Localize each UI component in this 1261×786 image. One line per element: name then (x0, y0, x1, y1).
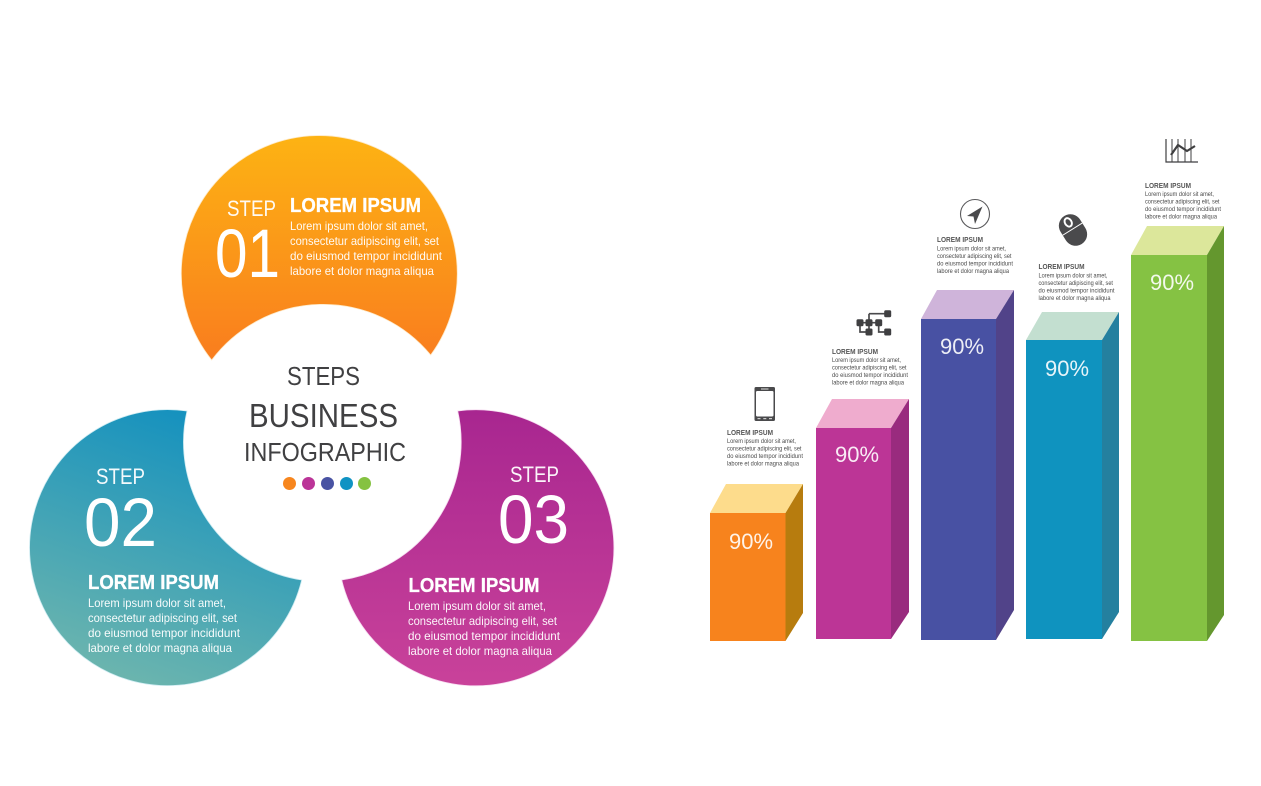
body text 02: do eiusmod tempor incididunt (88, 626, 241, 640)
bar 2: magenta: 90% (835, 442, 879, 467)
caption: bar 2: labore et dolor magna aliqua (832, 380, 904, 386)
caption: bar 2: Lorem ipsum dolor sit amet, (832, 357, 901, 364)
bar 5: green: 90% (1150, 270, 1194, 295)
icon: computer mouse (1055, 210, 1091, 250)
title: steps business infographic: STEPS (287, 361, 360, 391)
body text 01: Lorem ipsum dolor sit amet, (290, 219, 428, 233)
bar 5: green (1131, 226, 1224, 641)
body text 02: Lorem ipsum dolor sit amet, (88, 596, 226, 610)
panel: step 01 (181, 136, 457, 360)
bar 4: blue: 90% (1045, 356, 1089, 381)
body text 03: do eiusmod tempor incididunt (408, 629, 561, 643)
caption: bar 1 (727, 430, 803, 468)
body text 01 (290, 219, 443, 278)
body text 03 (408, 599, 561, 658)
step number 03: 03 (498, 481, 569, 558)
caption: bar 3: consectetur adipiscing elit, set (937, 253, 1012, 260)
body text 03: consectetur adipiscing elit, set (408, 614, 558, 628)
caption: bar 4: do eiusmod tempor incididunt (1038, 288, 1115, 294)
caption: bar 1: consectetur adipiscing elit, set (727, 446, 802, 452)
title: steps business infographic: INFOGRAPHIC (244, 437, 406, 467)
caption: bar 1: LOREM IPSUM (727, 430, 773, 437)
caption: bar 5 (1145, 183, 1221, 220)
icon: compass (960, 200, 990, 228)
bar chart (710, 226, 1224, 641)
caption: bar 1: labore et dolor magna aliqua (727, 460, 799, 468)
icon: smartphone (754, 387, 775, 421)
caption: bar 2: consectetur adipiscing elit, set (832, 364, 907, 372)
caption: bar 4 (1038, 264, 1115, 302)
step number 02: 02 (84, 484, 157, 561)
caption: bar 4: Lorem ipsum dolor sit amet, (1038, 272, 1108, 280)
shape: orange crescent (181, 136, 457, 360)
caption: bar 5: do eiusmod tempor incididunt (1145, 206, 1221, 213)
bar 2: magenta (816, 399, 909, 639)
caption: bar 5: Lorem ipsum dolor sit amet, (1145, 191, 1214, 198)
bar 1: orange: 90% (729, 529, 773, 554)
caption: bar 2: LOREM IPSUM (832, 349, 878, 356)
body text 03: labore et dolor magna aliqua (408, 644, 552, 658)
heading 01: LOREM IPSUM (290, 195, 421, 217)
bar 3: indigo (921, 290, 1014, 640)
caption: bar 2 (832, 349, 908, 386)
caption: bar 5: consectetur adipiscing elit, set (1145, 198, 1220, 206)
caption: bar 4: consectetur adipiscing elit, set (1038, 280, 1113, 287)
body text 02 (88, 596, 241, 655)
caption: bar 3: do eiusmod tempor incididunt (937, 260, 1013, 268)
title: steps business infographic (244, 361, 406, 467)
body text 03: Lorem ipsum dolor sit amet, (408, 599, 546, 613)
icon: line chart (1166, 139, 1198, 162)
body text 01: do eiusmod tempor incididunt (290, 249, 443, 263)
bar 1: orange (710, 484, 803, 641)
title: steps business infographic: BUSINESS (249, 397, 398, 434)
heading 02: LOREM IPSUM (88, 572, 219, 594)
step label 02: STEP (96, 464, 145, 489)
caption: bar 2: do eiusmod tempor incididunt (832, 372, 908, 379)
caption: bar 5: labore et dolor magna aliqua (1145, 214, 1217, 220)
bar 3: indigo: 90% (940, 334, 984, 359)
step label 01: STEP (227, 196, 276, 221)
step number 01: 01 (215, 215, 280, 292)
body text 01: consectetur adipiscing elit, set (290, 234, 440, 248)
icon: network diagram (856, 310, 891, 336)
heading 03: LOREM IPSUM (408, 575, 540, 597)
caption: bar 4: labore et dolor magna aliqua (1038, 295, 1111, 302)
caption: bar 5: LOREM IPSUM (1145, 183, 1191, 190)
caption: bar 1: do eiusmod tempor incididunt (727, 453, 803, 460)
caption: bar 3: LOREM IPSUM (937, 237, 983, 244)
caption: bar 4: LOREM IPSUM (1038, 264, 1085, 271)
body text 01: labore et dolor magna aliqua (290, 264, 434, 278)
panel: step 02 (30, 410, 302, 686)
shape: magenta crescent (342, 410, 614, 686)
caption: bar 3: Lorem ipsum dolor sit amet, (937, 246, 1006, 252)
panel: step 03 (342, 410, 614, 686)
body text 02: consectetur adipiscing elit, set (88, 611, 238, 625)
step label 03: STEP (510, 462, 559, 487)
caption: bar 3: labore et dolor magna aliqua (937, 268, 1009, 275)
caption: bar 3 (937, 237, 1013, 275)
caption: bar 1: Lorem ipsum dolor sit amet, (727, 438, 796, 445)
shape: teal crescent (30, 410, 302, 686)
bar 4: blue (1026, 312, 1119, 639)
body text 02: labore et dolor magna aliqua (88, 641, 232, 655)
legend dots (283, 477, 371, 490)
